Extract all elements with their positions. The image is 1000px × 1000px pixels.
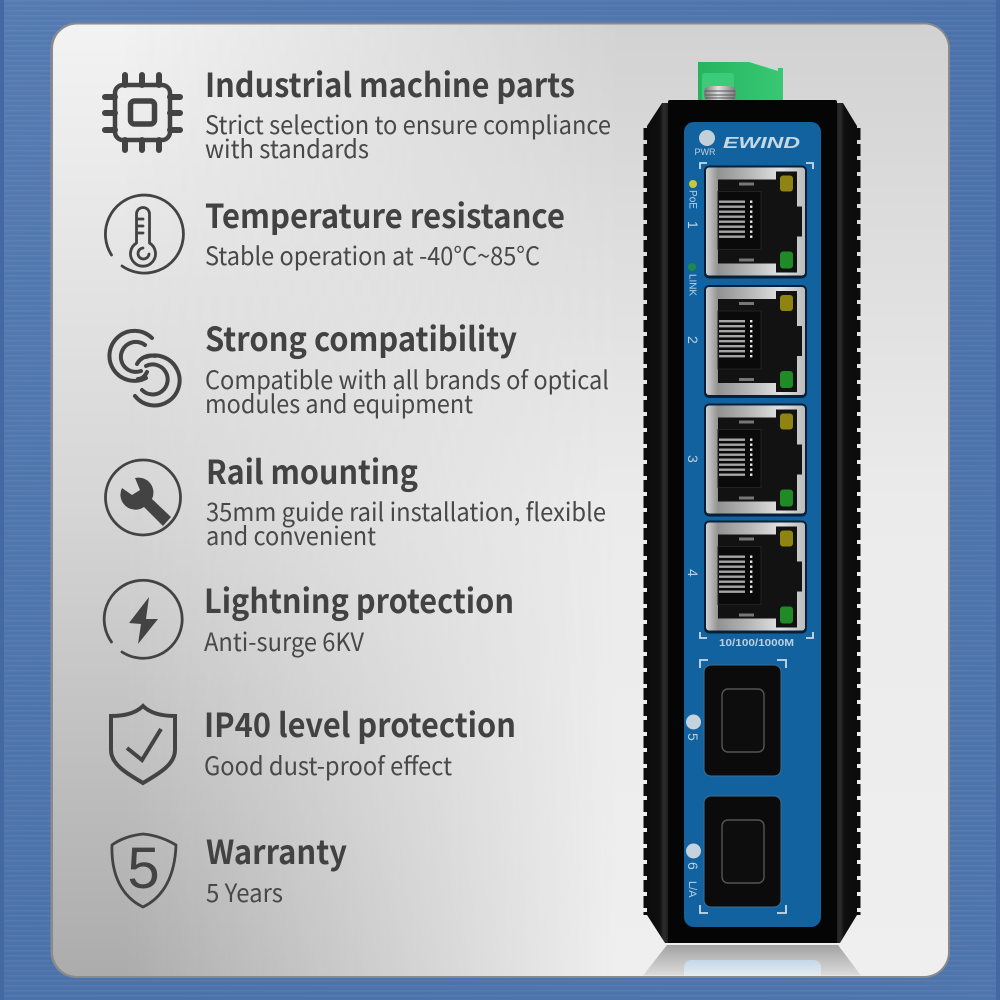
- icon: linked rings: [109, 331, 180, 405]
- speed label: 10/100/1000M: [719, 638, 794, 649]
- blue faceplate: [684, 122, 821, 927]
- sfp 5 led and label: 5: [685, 733, 701, 741]
- port numbers: 1: [685, 221, 701, 229]
- port numbers: [685, 221, 701, 577]
- device reflection: [643, 945, 861, 976]
- text: strict selection: [205, 106, 611, 166]
- text: good dust-proof: Good dust-proof effect: [204, 747, 453, 783]
- right rib: [836, 103, 858, 943]
- text: 5 years: 5 Years: [206, 874, 283, 910]
- power led and label: PWR: [694, 147, 716, 158]
- power led and label: [694, 130, 716, 158]
- sfp 5 led and label: [685, 714, 701, 741]
- text: compatible with: Compatible with all brands of optical: [205, 361, 609, 397]
- heading: rail mounting: Rail mounting: [206, 446, 418, 494]
- rj45 port 1: [704, 166, 807, 278]
- icon: wrench: [106, 460, 180, 535]
- text: compatible with: modules and equipment: [205, 385, 474, 421]
- icon: shield five: [112, 834, 176, 907]
- icon: lightning: [104, 580, 182, 658]
- heading: warranty: Warranty: [206, 826, 347, 874]
- green terminal connector: [698, 62, 783, 101]
- sfp port 6: [704, 796, 781, 907]
- icon: shield check: [111, 706, 175, 783]
- heading: ip40 level protection: IP40 level protection: [204, 699, 516, 747]
- icon: thermometer: [105, 195, 183, 273]
- sfp 6 led and label: L/A: [686, 881, 698, 898]
- link indicator: LINK: [686, 274, 698, 296]
- heading: industrial machine parts: Industrial machine parts: [205, 59, 575, 107]
- text: 35mm guide rail: [206, 493, 606, 553]
- poe indicator: [686, 180, 698, 209]
- device: ethernet switch: [643, 62, 861, 976]
- icon: chip: [105, 75, 180, 150]
- text: 35mm guide rail: and convenient: [206, 517, 377, 553]
- text: strict selection: with standards: [205, 130, 369, 166]
- text: strict selection: Strict selection to ensure compliance: [205, 106, 611, 142]
- text: stable operation: Stable operation at -40°C~85°C: [205, 237, 540, 273]
- brand logo: EWIND: [723, 135, 801, 152]
- heading: temperature resistance: Temperature resistance: [205, 190, 565, 238]
- port numbers: 2: [685, 336, 701, 344]
- rj45 port 4: [704, 520, 807, 634]
- link indicator: [686, 263, 698, 296]
- rj45 port 2: [704, 285, 807, 398]
- port numbers: 4: [685, 569, 701, 577]
- sfp 6 led and label: [685, 844, 701, 898]
- icon: shield five: 5: [127, 836, 160, 901]
- heading: strong compatibility: Strong compatibility: [205, 313, 517, 361]
- left rib: [646, 103, 668, 943]
- centre body: [668, 100, 837, 943]
- poe indicator: PoE: [686, 190, 698, 209]
- text: 35mm guide rail: 35mm guide rail installation, flexible: [206, 493, 606, 529]
- port brackets: [700, 163, 813, 913]
- text: anti-surge: Anti-surge 6KV: [204, 623, 365, 659]
- text: compatible with: [205, 361, 609, 421]
- rj45 port 3: [704, 404, 807, 516]
- heading: lightning protection: Lightning protection: [204, 575, 514, 623]
- sfp port 5: [704, 665, 781, 776]
- sfp 6 led and label: 6: [685, 862, 701, 870]
- port numbers: 3: [685, 455, 701, 463]
